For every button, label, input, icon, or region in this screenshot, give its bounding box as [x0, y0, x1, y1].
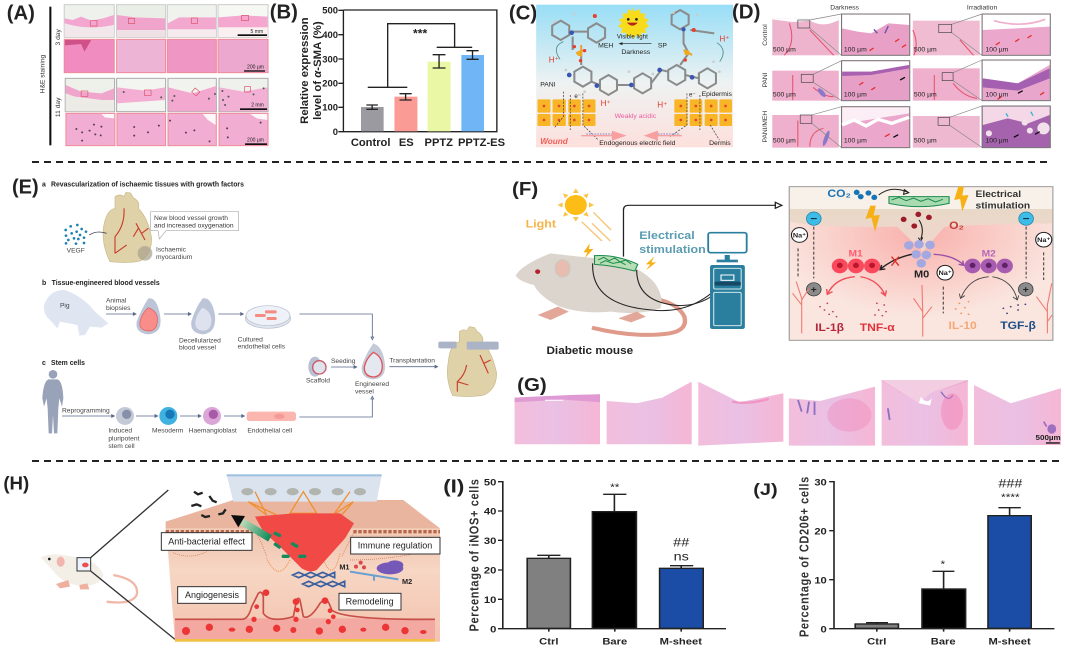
section b heading: Tissue-engineered blood vessels: [52, 280, 160, 287]
proton labels: H⁺: [549, 56, 559, 65]
tissue details: [515, 380, 1056, 434]
proton labels: [549, 34, 730, 109]
cell bead rows: [166, 527, 440, 537]
significance marks: [940, 476, 1023, 570]
M1 M2 balance: [339, 560, 412, 586]
cell texture: [173, 533, 417, 571]
y ticks: 10: [484, 596, 497, 606]
scale bars: 100 µm: [986, 46, 1009, 53]
significance marks: ##: [673, 536, 690, 549]
label J: (J): [753, 480, 778, 499]
equilibrium arrows and text: SP: [658, 42, 667, 49]
y tick labels: [322, 5, 338, 137]
panel A: H&E staining micrographs: [7, 2, 268, 146]
significance marks: ****: [1001, 493, 1020, 503]
cytokine labels: IL-1β: [815, 322, 844, 334]
captions row c: Mesoderm: [152, 428, 184, 435]
y tick labels: 500: [322, 5, 338, 16]
icon: fresh vessel: [136, 298, 161, 334]
icon: heart: [103, 192, 152, 263]
M2 macrophages: M2: [982, 249, 996, 259]
icon: decellularized vessel: [191, 298, 215, 334]
scale bars: 500 µm: [914, 92, 937, 99]
x labels: M-sheet: [988, 637, 1031, 647]
equilibrium arrows and text: Darkness: [621, 49, 651, 56]
light rays and label: [526, 212, 611, 241]
arrows: endogenous electric field: [581, 131, 682, 141]
panel G: histology strip: [515, 375, 1061, 446]
sodium ions: [791, 228, 1052, 280]
heart captions: VEGF: [67, 247, 85, 254]
panel D: histology darkness vs irradiation: [732, 2, 1050, 148]
remodeling mesh: [293, 572, 345, 587]
x labels: Bare: [931, 637, 956, 647]
y ticks: 20: [484, 566, 497, 576]
icon: VEGF particles: [64, 224, 87, 245]
label F: (F): [512, 179, 538, 200]
x labels: M-sheet: [660, 637, 703, 647]
cell nuclei and dashed lines: [543, 92, 727, 140]
panel B: alpha-SMA bar chart: [270, 2, 505, 149]
label D: (D): [732, 2, 760, 24]
bars: [527, 512, 703, 628]
staining and day labels: H&E staining: [40, 54, 47, 93]
day 3 overview tiles: [64, 5, 268, 37]
positive charges: +: [1023, 285, 1029, 296]
section a heading: Revascularization of ischaemic tissues with growth factors: [51, 182, 244, 189]
significance marks: **: [610, 483, 620, 493]
M2 macrophages: [965, 249, 1013, 273]
patch: green mesh: [595, 256, 638, 271]
equilibrium arrows and text: [598, 35, 667, 56]
panel H: microneedle wound healing mechanism: [3, 472, 440, 642]
proton labels: H⁺: [657, 100, 667, 109]
scale bars: 500 µm: [773, 92, 796, 99]
y axis title: Relative expression: [299, 17, 311, 124]
reprogramming arrow: [62, 408, 114, 417]
bacteria: [191, 492, 226, 517]
panel J: CD206 bar chart: [753, 476, 1054, 647]
significance marks: *: [940, 559, 946, 570]
label text: [168, 537, 432, 607]
M1 macrophages: M1: [848, 249, 863, 259]
panel E: revascularization strategies: [12, 177, 499, 450]
bars: [855, 516, 1031, 628]
y ticks: 40: [484, 507, 497, 517]
y ticks: 0: [821, 625, 827, 635]
divider: [32, 161, 1052, 163]
animal biopsies arrow: [106, 297, 136, 315]
y tick labels: 100: [322, 102, 338, 113]
arrow to inset: [623, 202, 782, 257]
panel C text labels: e⁻: [574, 94, 581, 100]
y axis title: Percentage of iNOS+ cells: [466, 478, 482, 632]
proton labels: H⁺: [601, 99, 611, 108]
background: [536, 5, 733, 147]
dashed ion arrows: [798, 227, 1044, 313]
oxygen and dots: O₂: [949, 220, 964, 232]
transplantation arrow: Transplantation: [389, 358, 435, 365]
M0 cell cluster: M0: [914, 269, 929, 281]
scaffold and seeding: Seeding: [331, 358, 356, 365]
y tick labels: 400: [322, 29, 338, 40]
captions row b: Cultured: [238, 336, 263, 343]
heart captions: Ischaemic: [156, 247, 187, 254]
column headers: [830, 5, 997, 12]
significance bracket: [368, 24, 472, 87]
staining and day labels: 11 day: [55, 97, 62, 117]
error bars: [866, 508, 1021, 624]
icons: lightning: [584, 243, 656, 270]
y ticks: 50: [484, 478, 497, 488]
icon: pig: [44, 290, 108, 336]
cell grid: epidermis side: [674, 99, 732, 126]
label B: (B): [270, 2, 298, 24]
x labels: [867, 637, 1031, 647]
y tick labels: 0: [333, 126, 338, 137]
scale bars: 100 µm: [986, 138, 1009, 145]
scale bars: [773, 46, 1009, 145]
reprogramming arrow: Reprogramming: [62, 408, 110, 415]
icon: pig: Pig: [60, 303, 70, 310]
panel C text labels: Wound: [540, 137, 569, 146]
label text: Immune regulation: [358, 541, 432, 551]
icon: stimulator device: [708, 233, 747, 329]
scale bars: 100 µm: [844, 46, 867, 53]
row labels: PANI: [762, 72, 769, 88]
vertical bar: [49, 7, 51, 145]
captions row c: [108, 428, 293, 450]
scale bars: 500 µm: [914, 138, 937, 145]
y tick labels: 300: [322, 53, 338, 64]
icon: rat with marked wound: [41, 554, 137, 602]
day 11 overview tiles: 2 mm: [251, 103, 264, 109]
blood vessels: [793, 282, 1052, 337]
panel C text labels: Weakly acidic: [615, 113, 657, 120]
arrow: antibacterial: [231, 515, 270, 538]
column headers: Irradiation: [967, 5, 997, 12]
panel I: iNOS bar chart: [443, 476, 726, 647]
wound: [255, 513, 354, 571]
label I: (I): [443, 476, 464, 497]
x labels: Bare: [602, 637, 628, 647]
M1 M2 balance: M1: [339, 562, 350, 571]
icon: smiling sun: [618, 7, 649, 39]
day 11 magnified tiles: 200 µm: [247, 138, 264, 144]
equilibrium arrows and text: MEH: [598, 42, 613, 49]
y ticks: [484, 478, 497, 635]
engineered vessel: [355, 343, 389, 396]
label text: Remodeling: [346, 597, 394, 607]
bars: [361, 55, 484, 131]
y ticks: [814, 478, 827, 635]
transplantation arrow: [389, 358, 438, 368]
section c heading: Stem cells: [51, 360, 85, 367]
CO2 bubbles: CO₂: [827, 188, 851, 200]
diabetic mouse caption: Diabetic mouse: [546, 345, 633, 357]
captions row c: pluripotent: [108, 435, 140, 442]
label H: (H): [3, 472, 29, 493]
callout: and increased oxygenation: [154, 222, 234, 229]
skin block: [166, 500, 440, 642]
day 3 magnified tiles: 200 µm: [247, 65, 264, 71]
icon: transplanted heart: [438, 327, 499, 397]
scale bars: 100 µm: [844, 92, 867, 99]
section a heading: a: [42, 182, 46, 189]
scaffold and seeding: Scaffold: [306, 377, 330, 384]
electrical stimulation label: [639, 229, 706, 256]
tissue sections: [515, 380, 1061, 446]
significance marks: [610, 483, 690, 563]
x labels: Ctrl: [867, 637, 887, 647]
panel C text labels: [540, 82, 733, 147]
divider lower: [32, 460, 1062, 462]
animal biopsies arrow: biopsies: [106, 305, 131, 312]
axes: [829, 481, 1054, 632]
label A: (A): [7, 2, 35, 24]
error bars: [537, 494, 693, 568]
scale bars: 500 µm: [914, 46, 937, 53]
x labels: Control: [351, 137, 390, 149]
electrical stimulation label: Electrical: [639, 229, 695, 242]
arrow: [164, 313, 191, 315]
electrical stimulation label: stimulation: [639, 243, 706, 256]
callout: New blood vessel growth: [154, 215, 228, 222]
positive charges: [806, 283, 1033, 296]
electrical stimulation text: Electrical: [976, 189, 1021, 200]
y axis title: level of α-SMA (%): [312, 21, 324, 120]
series arrows: [136, 415, 244, 417]
y ticks: 20: [814, 527, 827, 537]
y tick labels: 200: [322, 78, 338, 89]
significance marks: ns: [674, 549, 689, 563]
panel C text labels: Endogenous electric field: [599, 140, 676, 147]
y ticks: 0: [490, 625, 497, 635]
x labels: [539, 637, 703, 647]
scale bars: 100 µm: [844, 138, 867, 145]
captions row c: Haemangioblast: [189, 428, 237, 435]
row labels: [762, 24, 769, 142]
captions row b: [179, 336, 286, 352]
equilibrium arrows and text: Visible light: [617, 35, 648, 41]
day 11 overview tiles: [65, 78, 268, 112]
captions row c: Induced: [108, 428, 132, 435]
staining and day labels: [40, 29, 62, 117]
electrical stimulation text: [976, 189, 1030, 211]
error bars: [366, 51, 479, 110]
row: PANI/MEH: [772, 106, 1050, 148]
inset: mechanism: [789, 187, 1053, 340]
M0 cell cluster: [904, 240, 935, 281]
icon: human silhouette: [42, 370, 63, 433]
engineered vessel: Engineered: [355, 381, 389, 388]
cytokine labels: TGF-β: [1000, 320, 1036, 332]
cytokine labels: TNF-α: [860, 322, 895, 334]
day 3 magnified tiles: [64, 39, 268, 73]
connector: row c to engineered vessel: [299, 396, 374, 417]
cytokine labels: [815, 320, 1036, 334]
microneedle patch: [227, 474, 382, 502]
scale bars: 500 µm: [773, 138, 796, 145]
panel C text labels: Dermis: [709, 140, 731, 147]
M1 macrophages: [832, 249, 880, 273]
y axis title: Percentage of CD206+ cells: [796, 476, 812, 637]
molecule: PANI and spiropyran: [552, 10, 716, 95]
stem cell series: [116, 407, 296, 425]
day 11 magnified tiles: [66, 113, 268, 146]
label G: (G): [517, 375, 547, 396]
inset background: [789, 187, 1053, 340]
y ticks: 30: [484, 537, 497, 547]
sodium ions: Na⁺: [793, 233, 806, 239]
significance marks: ###: [998, 476, 1023, 490]
red blood cells: [182, 589, 427, 635]
row labels: Control: [762, 24, 769, 46]
row: control: [772, 14, 1050, 55]
x labels: ES: [399, 137, 414, 149]
captions row b: Decellularized: [179, 337, 221, 344]
sodium ions: Na⁺: [1037, 237, 1051, 244]
heart captions: [67, 247, 193, 261]
captions row b: endothelial cells: [238, 344, 286, 351]
M1 M2 balance: M2: [402, 577, 412, 586]
axes: [498, 481, 726, 632]
illustration: mouse: [516, 253, 685, 335]
heart captions: myocardium: [156, 254, 193, 261]
wires: [593, 263, 728, 311]
captions row c: Endothelial cell: [247, 428, 293, 435]
cytokine labels: IL-10: [949, 320, 977, 332]
icon: petri dish: [245, 306, 291, 328]
axes and ticks: [338, 10, 497, 132]
cytokine dots: [819, 301, 1026, 317]
panel C text labels: PANI: [540, 82, 556, 89]
panel F: electrical stimulation of diabetic mouse: [512, 179, 1053, 357]
label text: Anti-bacterial effect: [168, 537, 246, 547]
animal biopsies arrow: Animal: [106, 297, 127, 304]
section b heading: b: [42, 280, 46, 287]
cell grid: wound side: [538, 99, 596, 126]
green ROS particles: [273, 531, 306, 558]
label C: (C): [509, 3, 537, 24]
panel C text labels: e⁻: [689, 93, 696, 99]
scale bar: 500µm: [1036, 433, 1061, 442]
column headers: Darkness: [830, 5, 860, 12]
mesh patch: [889, 197, 949, 207]
arrow: [218, 313, 243, 315]
x labels: Ctrl: [539, 637, 559, 647]
icon: sun: [557, 188, 594, 222]
x labels: PPTZ-ES: [458, 137, 505, 149]
x labels: PPTZ: [425, 137, 453, 149]
molecule atoms: [553, 11, 721, 93]
callout: [151, 212, 239, 239]
CO2 bubbles: [827, 188, 909, 200]
scale bars: 100 µm: [986, 92, 1009, 99]
lightning icons: [866, 187, 969, 232]
panel C text labels: Epidermis: [702, 91, 733, 98]
zoom lines: [91, 490, 175, 639]
polarization arrows: [827, 254, 1019, 300]
curved proton arrows: [556, 42, 723, 62]
label boxes: [161, 533, 440, 610]
orange light rays: [248, 492, 353, 515]
scale bars: 500 µm: [773, 46, 796, 53]
positive charges: +: [811, 285, 817, 296]
oxygen and dots: [901, 212, 964, 241]
connector: row b to engineered vessel: [299, 314, 374, 340]
label text: Angiogenesis: [185, 590, 239, 600]
scaffold and seeding: [306, 357, 357, 384]
label E: (E): [12, 177, 39, 199]
negative ions: [806, 212, 1033, 225]
electrical stimulation text: stimulation: [976, 201, 1030, 211]
y ticks: 30: [814, 478, 827, 488]
arrow: VEGF to heart: [89, 232, 107, 235]
captions row b: blood vessel: [179, 345, 217, 352]
panel C: conductive polymer schematic: [509, 3, 733, 147]
captions row c: stem cell: [108, 443, 135, 450]
y ticks: 10: [814, 576, 827, 586]
light rays and label: Light: [526, 217, 556, 230]
row labels: PANI/MEH: [762, 111, 769, 142]
proton labels: H⁺: [719, 34, 730, 43]
section c heading: c: [42, 360, 46, 367]
engineered vessel: vessel: [355, 389, 374, 396]
sodium ions: Na⁺: [938, 270, 952, 277]
y axis title: [299, 17, 324, 124]
significance bracket: ***: [413, 26, 428, 40]
x labels: [351, 137, 505, 149]
row: PANI: [772, 60, 1050, 101]
staining and day labels: 3 day: [55, 29, 62, 45]
day 3 overview tiles: 5 mm: [251, 29, 263, 35]
